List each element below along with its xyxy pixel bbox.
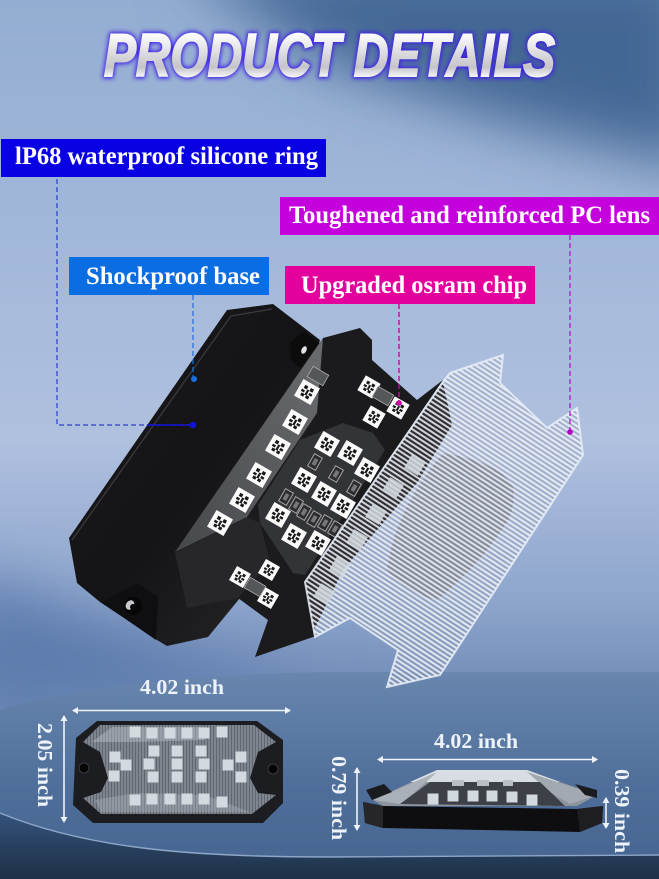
circuit board bbox=[175, 328, 443, 657]
callout: Upgraded osram chip: Upgraded osram chip bbox=[301, 272, 527, 299]
dimension: height 0.79 inch: 0.79 inch bbox=[327, 756, 351, 840]
side view product with dimensions bbox=[327, 729, 634, 853]
front view light body bbox=[73, 721, 283, 823]
callout: Upgraded osram chip bbox=[285, 266, 535, 406]
dimension: length 4.02 inch bbox=[377, 729, 598, 763]
dimension: height 2.05 inch: 2.05 inch bbox=[33, 723, 57, 807]
dimension: width 4.02 inch bbox=[72, 675, 291, 714]
shockproof base bbox=[69, 304, 320, 646]
callout: IP68 waterproof silicone ring bbox=[1, 139, 326, 428]
front view product with dimensions bbox=[33, 675, 291, 823]
dimension: height 0.39 inch: 0.39 inch bbox=[610, 769, 634, 853]
dimension: width 4.02 inch: 4.02 inch bbox=[140, 675, 224, 699]
toughened PC lens bbox=[305, 355, 583, 687]
dimension: height 0.79 inch bbox=[327, 756, 360, 840]
title: PRODUCT DETAILS bbox=[104, 22, 555, 89]
callout: Toughened and reinforced PC lens: Toughened and reinforced PC lens bbox=[289, 202, 650, 229]
dimension: length 4.02 inch: 4.02 inch bbox=[434, 729, 518, 753]
callout: Toughened and reinforced PC lens bbox=[280, 197, 659, 435]
product exploded view: base, circuit board, lens bbox=[69, 304, 583, 687]
side view light body bbox=[363, 770, 603, 832]
callout: Shockproof base bbox=[69, 257, 269, 382]
callout: IP68 waterproof silicone ring: lP68 waterproof silicone ring bbox=[15, 143, 318, 170]
LED chips bbox=[207, 366, 410, 609]
dimension: height 2.05 inch bbox=[33, 715, 68, 823]
callout: Shockproof base: Shockproof base bbox=[86, 263, 260, 290]
title: PRODUCT DETAILS bbox=[104, 22, 555, 89]
